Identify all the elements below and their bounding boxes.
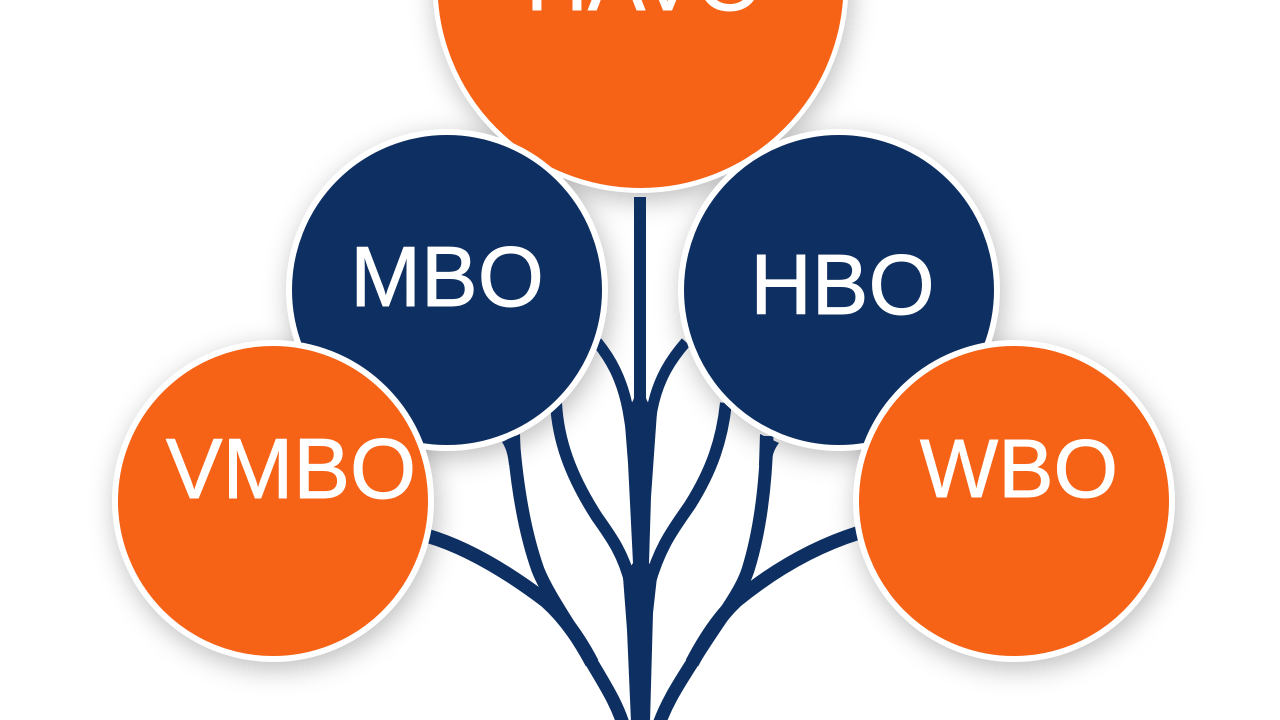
tree branches [428,197,858,720]
side branches [428,342,858,720]
circle: HBO [681,132,997,448]
circle: VMBO [115,343,431,659]
circle: HAVO [435,0,846,190]
circle: MBO: MBO [350,230,544,325]
circle: HBO: HBO [750,238,935,333]
circle: WBO: WBO [920,422,1118,515]
circle: WBO [856,343,1172,659]
circle: VMBO: VMBO [166,422,416,517]
trunk [623,197,657,720]
circle: MBO [289,132,605,448]
branch flares [502,434,779,465]
